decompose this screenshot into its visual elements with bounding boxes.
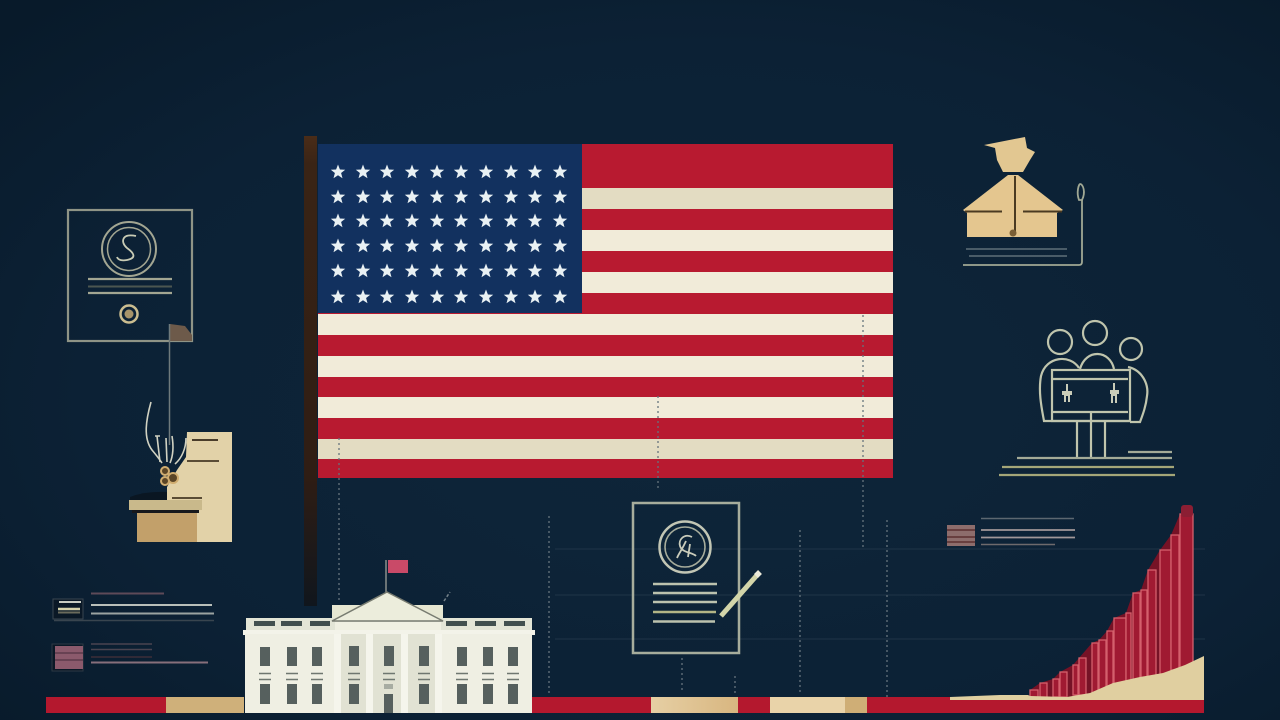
rising bar chart bbox=[884, 505, 1204, 713]
icon: people with sign board bbox=[999, 321, 1175, 475]
White House bbox=[243, 560, 535, 713]
icon: hand at podium bbox=[129, 402, 232, 542]
rooftop flag bbox=[386, 560, 408, 592]
legend: chart notes bbox=[947, 518, 1075, 546]
legend: lower-left notes bbox=[52, 644, 208, 671]
icon: certificate with seal bbox=[68, 210, 192, 445]
pencil bbox=[721, 572, 760, 616]
sign figures bbox=[1062, 383, 1119, 403]
cream area bbox=[950, 656, 1204, 700]
timeline bar bbox=[46, 697, 1204, 713]
icon: signed document with pencil bbox=[633, 503, 760, 653]
flag canton with stars bbox=[318, 144, 582, 313]
flag stripes bbox=[318, 188, 893, 459]
windows bbox=[260, 646, 518, 713]
flag pole bbox=[304, 136, 317, 606]
icon: graduate over house bbox=[963, 137, 1084, 265]
legend: top-left notes bbox=[53, 594, 214, 620]
American flag bbox=[318, 144, 893, 478]
columns bbox=[334, 634, 442, 713]
